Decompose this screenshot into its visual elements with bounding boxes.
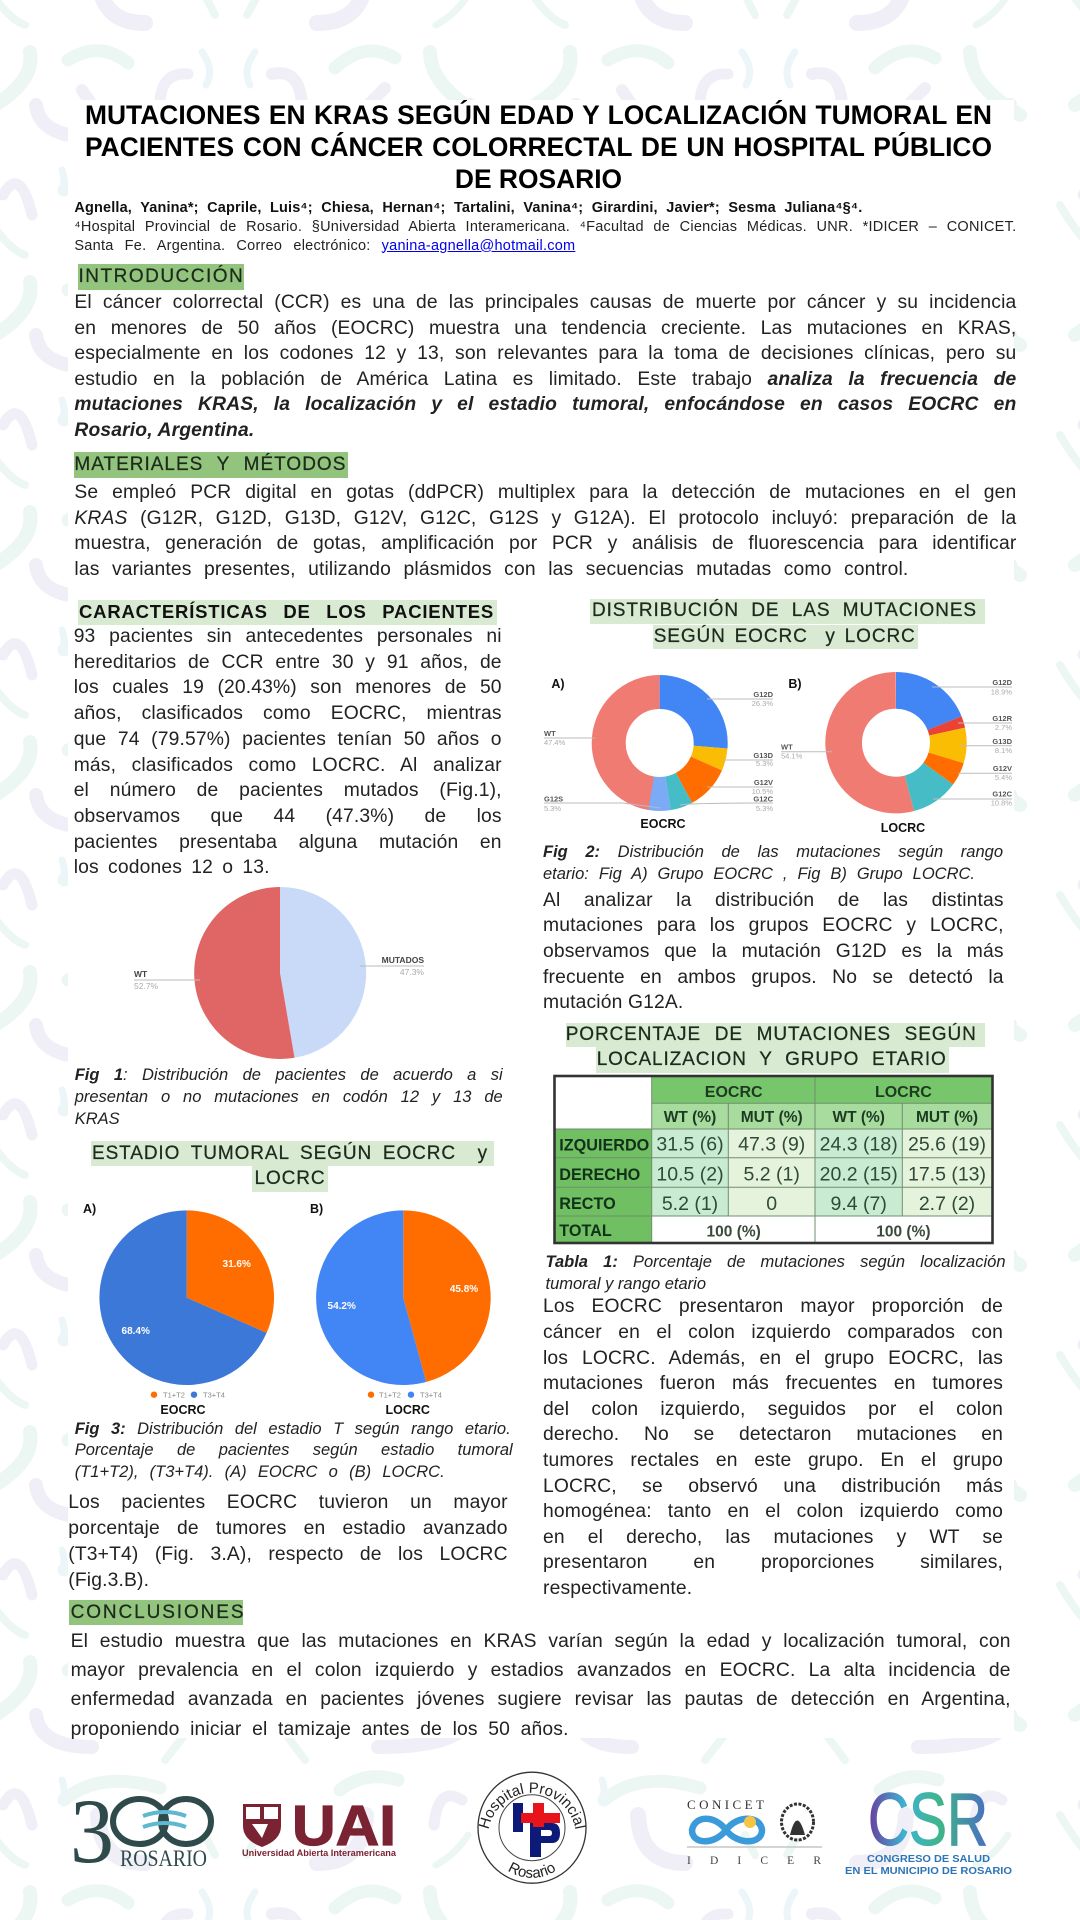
heading: distribución de las mutaciones xyxy=(590,598,985,649)
heading: porcentaje de mutaciones: PORCENTAJE DE MUTACIONES SEGÚN xyxy=(566,1024,977,1045)
row headers: DERECHO xyxy=(559,1166,640,1184)
caption: figure 2 xyxy=(543,842,1003,883)
caption: figure 1 xyxy=(74,1066,503,1128)
table values: 31.5 (6) xyxy=(656,1134,724,1156)
row headers: TOTAL xyxy=(559,1222,612,1240)
text block: distribución de las mutaciones: Al analizar la distribución de las distintas xyxy=(543,890,1004,911)
logo: Congreso de Salud: CONGRESO DE SALUD xyxy=(867,1853,990,1865)
text block: localización: homogénea: tanto en el colon izquierdo como xyxy=(543,1501,1003,1522)
panel label B: B) xyxy=(788,677,802,691)
column headers: WT (%) xyxy=(664,1109,716,1126)
labels: LOCRC: 8.1% xyxy=(995,746,1012,755)
text block: características de los pacientes: hereditarios de CCR entre 30 y 91 años, de xyxy=(74,652,502,673)
text block: materiales y métodos: KRAS (G12R, G12D, G13D, G12V, G12C, G12S y G12A). El protocolo incluyó: preparación de la xyxy=(74,508,1016,529)
text block: localización xyxy=(543,1296,1003,1599)
panel label B: B) xyxy=(310,1202,323,1216)
logo: CONICET IDICER xyxy=(687,1797,822,1867)
text block: estadio tumoral: (Fig.3.B). xyxy=(68,1570,149,1591)
donut: LOCRC xyxy=(844,690,948,795)
labels: EOCRC: 47.4% xyxy=(544,738,566,747)
text block: localización: LOCRC, se observó una distribución más xyxy=(543,1476,1003,1497)
caption: figure 2: Fig 2: Distribución de las mutaciones según rango xyxy=(543,842,1003,860)
labels: LOCRC: G12C xyxy=(992,790,1013,798)
caption: figure 3: Fig 3: Distribución del estadio T según rango etario. xyxy=(75,1420,511,1438)
logo: 300 Rosario: 3 xyxy=(70,1780,114,1882)
label: mutados: 47.3% xyxy=(400,967,424,977)
labels: LOCRC: G13D xyxy=(992,737,1013,746)
logo: CONICET IDICER: IDICER xyxy=(687,1855,821,1867)
labels: LOCRC: 2.7% xyxy=(995,723,1012,732)
text block: características de los pacientes xyxy=(74,626,502,878)
table values: 47.3 (9) xyxy=(738,1134,805,1156)
text block: introducción xyxy=(74,292,1016,441)
logo: Hospital Provincial: Rosario xyxy=(508,1862,555,1878)
text block: localización: Los EOCRC presentaron mayor proporción de xyxy=(543,1296,1003,1317)
group label: LOCRC: LOCRC xyxy=(881,821,925,835)
table values: 5.2 (1) xyxy=(744,1164,800,1186)
legend: EOCRC xyxy=(151,1390,225,1400)
labels: EOCRC: 10.5% xyxy=(752,787,773,796)
text block: características de los pacientes: el número de pacientes mutados (Fig.1), xyxy=(74,780,502,801)
pie: EOCRC: 31.6% xyxy=(223,1259,251,1270)
row headers: IZQUIERDO xyxy=(559,1137,649,1155)
heading: estadio tumoral: ESTADIO TUMORAL SEGÚN EOCRC y xyxy=(92,1143,488,1164)
panel label A: A) xyxy=(83,1202,96,1216)
legend: LOCRC: T1+T2 xyxy=(379,1390,401,1400)
column headers: LOCRC xyxy=(875,1084,932,1101)
table: mutaciones por localización xyxy=(553,1074,994,1244)
authors and affiliations: ⁴Hospital Provincial de Rosario. §Universidad Abierta Interamericana. ⁴Facultad de Ciencias Médicas. UNR. *IDICER – CONICET. xyxy=(74,219,1016,235)
text block: introducción: especialmente en los codones 12 y 13, son relevantes para la toma de decisiones clínicas, pero su xyxy=(74,343,1016,364)
text block: localización: tumores rectales en este grupo. En el grupo xyxy=(543,1450,1003,1471)
logo: 300 Rosario xyxy=(70,1780,214,1882)
text block: localización: mutaciones fueron más frecuentes en tumores xyxy=(543,1373,1003,1394)
group label: EOCRC: EOCRC xyxy=(160,1403,206,1417)
callouts: EOCRC xyxy=(544,699,773,808)
text block: localización: cáncer en el colon izquierdo comparados con xyxy=(543,1322,1003,1343)
table values: 20.2 (15) xyxy=(820,1164,898,1186)
labels: EOCRC: 5.3% xyxy=(544,804,561,813)
authors and affiliations xyxy=(74,200,1016,254)
heading: características de los pacientes: CARACTERÍSTICAS DE LOS PACIENTES xyxy=(79,601,494,622)
label: WT: WT xyxy=(134,969,148,979)
logo: Congreso de Salud: CSR xyxy=(868,1778,988,1861)
heading: conclusiones: CONCLUSIONES xyxy=(71,1602,245,1623)
labels: EOCRC: G13D xyxy=(753,751,774,760)
text block: conclusiones: proponiendo iniciar el tamizaje antes de los 50 años. xyxy=(71,1719,569,1740)
labels: EOCRC: 26.3% xyxy=(752,699,773,708)
text block: localización: presentaron en proporciones similares, xyxy=(543,1552,1003,1573)
chart: figure 2 donuts xyxy=(544,672,1013,835)
row headers xyxy=(559,1137,649,1240)
caption: figure 1: presentan o no mutaciones en codón 12 y 13 de xyxy=(75,1088,503,1106)
table totals: 100 (%) xyxy=(876,1224,931,1241)
legend: EOCRC: T3+T4 xyxy=(203,1390,225,1400)
table totals: 100 (%) xyxy=(707,1224,761,1241)
text block: estadio tumoral: Los pacientes EOCRC tuvieron un mayor xyxy=(68,1492,508,1513)
heading: introducción: INTRODUCCIÓN xyxy=(78,266,244,287)
panel: white content background xyxy=(68,100,1014,1738)
text block: características de los pacientes: observamos que 44 (47.3%) de los xyxy=(74,806,502,827)
text block: localización: los LOCRC. Además, en el grupo EOCRC, las xyxy=(543,1348,1003,1369)
text block: materiales y métodos: Se empleó PCR digital en gotas (ddPCR) multiplex para la detección de mutaciones en el gen xyxy=(74,482,1016,503)
labels: LOCRC: WT xyxy=(781,742,793,752)
text block: distribución de las mutaciones: observamos que la mutación G12D es la más xyxy=(543,941,1004,962)
column headers: MUT (%) xyxy=(741,1109,803,1126)
logo: Hospital Provincial xyxy=(477,1772,587,1884)
text block: distribución de las mutaciones: frecuente en ambos grupos. No se detectó la xyxy=(543,967,1004,988)
caption: figure 3 xyxy=(75,1420,513,1481)
table totals xyxy=(707,1224,931,1241)
text block: estadio tumoral: porcentaje de tumores en estadio avanzado xyxy=(68,1518,508,1539)
text block: localización: derecho. No se detectaron mutaciones en xyxy=(543,1424,1003,1445)
text block: características de los pacientes: que 74 (79.57%) pacientes tenían 50 años o xyxy=(74,729,502,750)
table values: 24.3 (18) xyxy=(820,1134,898,1156)
logo: 300 Rosario: ROSARIO xyxy=(120,1846,207,1871)
caption: tabla 1 xyxy=(546,1252,1006,1293)
text block: materiales y métodos xyxy=(74,482,1016,580)
table values: 10.5 (2) xyxy=(656,1164,724,1186)
logo: Congreso de Salud: EN EL MUNICIPIO DE ROSARIO xyxy=(845,1865,1012,1877)
column headers: EOCRC xyxy=(705,1084,763,1101)
legend: LOCRC: T3+T4 xyxy=(420,1390,442,1400)
caption: figure 3: Porcentaje de pacientes según estadio tumoral xyxy=(75,1441,513,1459)
pie: LOCRC: 54.2% xyxy=(328,1301,356,1312)
text block: características de los pacientes: más, clasificados como LOCRC. Al analizar xyxy=(74,755,502,776)
text block: conclusiones: mayor prevalencia en el colon izquierdo y estadios avanzados en EOCRC. La alta incidencia de xyxy=(71,1660,1011,1681)
title: PACIENTES CON CÁNCER COLORRECTAL DE UN HOSPITAL PÚBLICO xyxy=(85,132,992,162)
authors and affiliations: Agnella, Yanina*; Caprile, Luis⁴; Chiesa, Hernan⁴; Tartalini, Vanina⁴; Girardini, Javier*; Sesma Juliana⁴§⁴. xyxy=(74,200,862,216)
table values: 17.5 (13) xyxy=(908,1164,986,1186)
text block: conclusiones: enfermedad avanzada en pacientes jóvenes sugiere revisar las pautas de detección en Argentina, xyxy=(71,1689,1011,1710)
heading: porcentaje de mutaciones xyxy=(566,1022,985,1073)
label: mutados: MUTADOS xyxy=(382,955,424,965)
text block: materiales y métodos: muestra, generación de gotas, amplificación por PCR y análisis de fluorescencia para identificar xyxy=(74,533,1016,554)
caption: tabla 1: Tabla 1: Porcentaje de mutaciones según localización xyxy=(546,1252,1006,1270)
text block: características de los pacientes: los cuales 19 (20.43%) son menores de 50 xyxy=(74,677,502,698)
text block: características de los pacientes: pacientes presentaba alguna mutación en xyxy=(74,832,502,853)
pie: EOCRC: 68.4% xyxy=(122,1326,150,1337)
labels: LOCRC: 10.8% xyxy=(991,798,1012,808)
caption: figure 2: etario: Fig A) Grupo EOCRC , Fig B) Grupo LOCRC. xyxy=(543,865,975,883)
text block: distribución de las mutaciones: mutación G12A. xyxy=(543,992,683,1013)
labels: EOCRC: WT xyxy=(544,729,556,738)
text block: localización: en el derecho, las mutaciones y WT se xyxy=(543,1527,1003,1548)
heading: porcentaje de mutaciones: LOCALIZACION Y GRUPO ETARIO xyxy=(597,1049,947,1070)
text block: estadio tumoral xyxy=(68,1492,508,1591)
callouts: LOCRC xyxy=(781,687,1012,799)
legend: LOCRC xyxy=(368,1390,442,1400)
text block: introducción: Rosario, Argentina. xyxy=(74,420,254,441)
logo: CONICET IDICER: CONICET xyxy=(687,1797,764,1812)
table outer border xyxy=(554,1076,992,1243)
text block: introducción: en menores de 50 años (EOCRC) muestra una tendencia creciente. Las mutaciones en KRAS, xyxy=(74,318,1016,339)
title xyxy=(85,100,992,194)
panel label A: A) xyxy=(551,677,565,691)
logo: Hospital Provincial: Hospital Provincial xyxy=(478,1782,586,1829)
text block: distribución de las mutaciones xyxy=(543,890,1004,1013)
text block: distribución de las mutaciones: mutaciones para los grupos EOCRC y LOCRC, xyxy=(543,915,1004,936)
pie: LOCRC: 45.8% xyxy=(450,1284,478,1295)
text block: características de los pacientes: 93 pacientes sin antecedentes personales ni xyxy=(74,626,502,647)
row headers: RECTO xyxy=(559,1195,616,1213)
title: MUTACIONES EN KRAS SEGÚN EDAD Y LOCALIZACIÓN TUMORAL EN xyxy=(85,100,992,130)
heading: materiales y métodos: MATERIALES Y MÉTODOS xyxy=(74,454,346,475)
text block: materiales y métodos: las variantes presentes, utilizando plásmidos con las secuencias mutadas como control. xyxy=(74,559,908,580)
chart: figure 3 pies xyxy=(83,1202,491,1417)
column headers: WT (%) xyxy=(832,1109,885,1126)
text block: conclusiones xyxy=(71,1631,1011,1740)
pie: EOCRC xyxy=(99,1210,274,1385)
caption: figure 1: Fig 1: Distribución de pacientes de acuerdo a si xyxy=(75,1066,503,1084)
logo: UAI xyxy=(242,1794,397,1859)
labels: LOCRC xyxy=(781,678,1013,808)
table values: 0 xyxy=(766,1193,777,1215)
labels: LOCRC: 54.1% xyxy=(781,752,803,760)
title: DE ROSARIO xyxy=(455,164,622,194)
group label: EOCRC: EOCRC xyxy=(640,817,686,831)
table values: 9.4 (7) xyxy=(831,1193,887,1215)
authors and affiliations: Santa Fe. Argentina. Correo electrónico: yanina-agnella@hotmail.com xyxy=(74,238,575,254)
heading: estadio tumoral xyxy=(91,1141,494,1192)
table values: 25.6 (19) xyxy=(908,1134,986,1156)
logo: Congreso de Salud xyxy=(845,1778,1012,1877)
slice: mutados xyxy=(280,887,366,1058)
text block: características de los pacientes: años, clasificados como EOCRC, mientras xyxy=(74,703,502,724)
labels: EOCRC: G12V xyxy=(754,778,773,787)
labels: LOCRC: G12V xyxy=(993,764,1012,773)
caption: figure 1: KRAS xyxy=(75,1110,120,1128)
label: WT xyxy=(134,969,200,991)
text block: características de los pacientes: los codones 12 o 13. xyxy=(74,857,270,878)
labels: LOCRC: 5.4% xyxy=(995,773,1012,782)
logo: UAI: UAI xyxy=(292,1794,396,1858)
text block: introducción: mutaciones KRAS, la localización y el estadio tumoral, enfocándose en casos EOCRC en xyxy=(74,394,1016,415)
labels: LOCRC: G12D xyxy=(992,678,1013,687)
table values: 2.7 (2) xyxy=(919,1193,975,1215)
logo: UAI: Universidad Abierta Interamericana xyxy=(242,1848,397,1859)
pie: LOCRC xyxy=(316,1210,491,1385)
heading: estadio tumoral: LOCRC xyxy=(254,1168,326,1189)
group label: LOCRC: LOCRC xyxy=(385,1403,430,1417)
labels: LOCRC: 18.9% xyxy=(991,688,1012,696)
text block: localización: respectivamente. xyxy=(543,1578,692,1599)
labels: EOCRC: 5.3% xyxy=(756,804,773,813)
text block: introducción: El cáncer colorrectal (CCR) es una de las principales causas de muerte por cáncer y su incidencia xyxy=(74,292,1016,313)
pie chart: figure 1 xyxy=(134,887,424,1059)
table values xyxy=(656,1134,986,1215)
caption: tabla 1: tumoral y rango etario xyxy=(546,1275,706,1293)
caption: figure 3: (T1+T2), (T3+T4). (A) EOCRC o (B) LOCRC. xyxy=(75,1463,445,1481)
label: mutados xyxy=(360,955,424,977)
column headers: MUT (%) xyxy=(916,1109,978,1126)
text block: conclusiones: El estudio muestra que las mutaciones en KRAS varían según la edad y localización tumoral, con xyxy=(71,1631,1011,1652)
label: WT: 52.7% xyxy=(134,981,159,991)
labels: EOCRC: G12C xyxy=(753,794,774,804)
labels: LOCRC: G12R xyxy=(992,714,1013,723)
text block: localización: del colon izquierdo, seguidos por el colon xyxy=(543,1399,1003,1420)
text block: introducción: estudio en la población de América Latina es limitado. Este trabajo analiza la frecuencia de xyxy=(74,369,1016,390)
text block: estadio tumoral: (T3+T4) (Fig. 3.A), respecto de los LOCRC xyxy=(68,1544,508,1565)
table cell backgrounds xyxy=(555,1076,992,1242)
labels: EOCRC: 5.3% xyxy=(756,759,773,768)
table grid lines xyxy=(555,1076,992,1242)
column headers xyxy=(664,1084,978,1126)
labels: EOCRC: G12S xyxy=(544,794,563,804)
heading: distribución de las mutaciones: DISTRIBUCIÓN DE LAS MUTACIONES xyxy=(592,600,977,621)
legend: EOCRC: T1+T2 xyxy=(163,1390,185,1400)
table values: 5.2 (1) xyxy=(662,1193,718,1215)
donut: EOCRC xyxy=(609,692,711,794)
labels: EOCRC xyxy=(544,690,774,813)
slice: WT xyxy=(194,887,294,1059)
heading: distribución de las mutaciones: SEGÚN EOCRC y LOCRC xyxy=(654,626,916,646)
labels: EOCRC: G12D xyxy=(753,690,774,699)
